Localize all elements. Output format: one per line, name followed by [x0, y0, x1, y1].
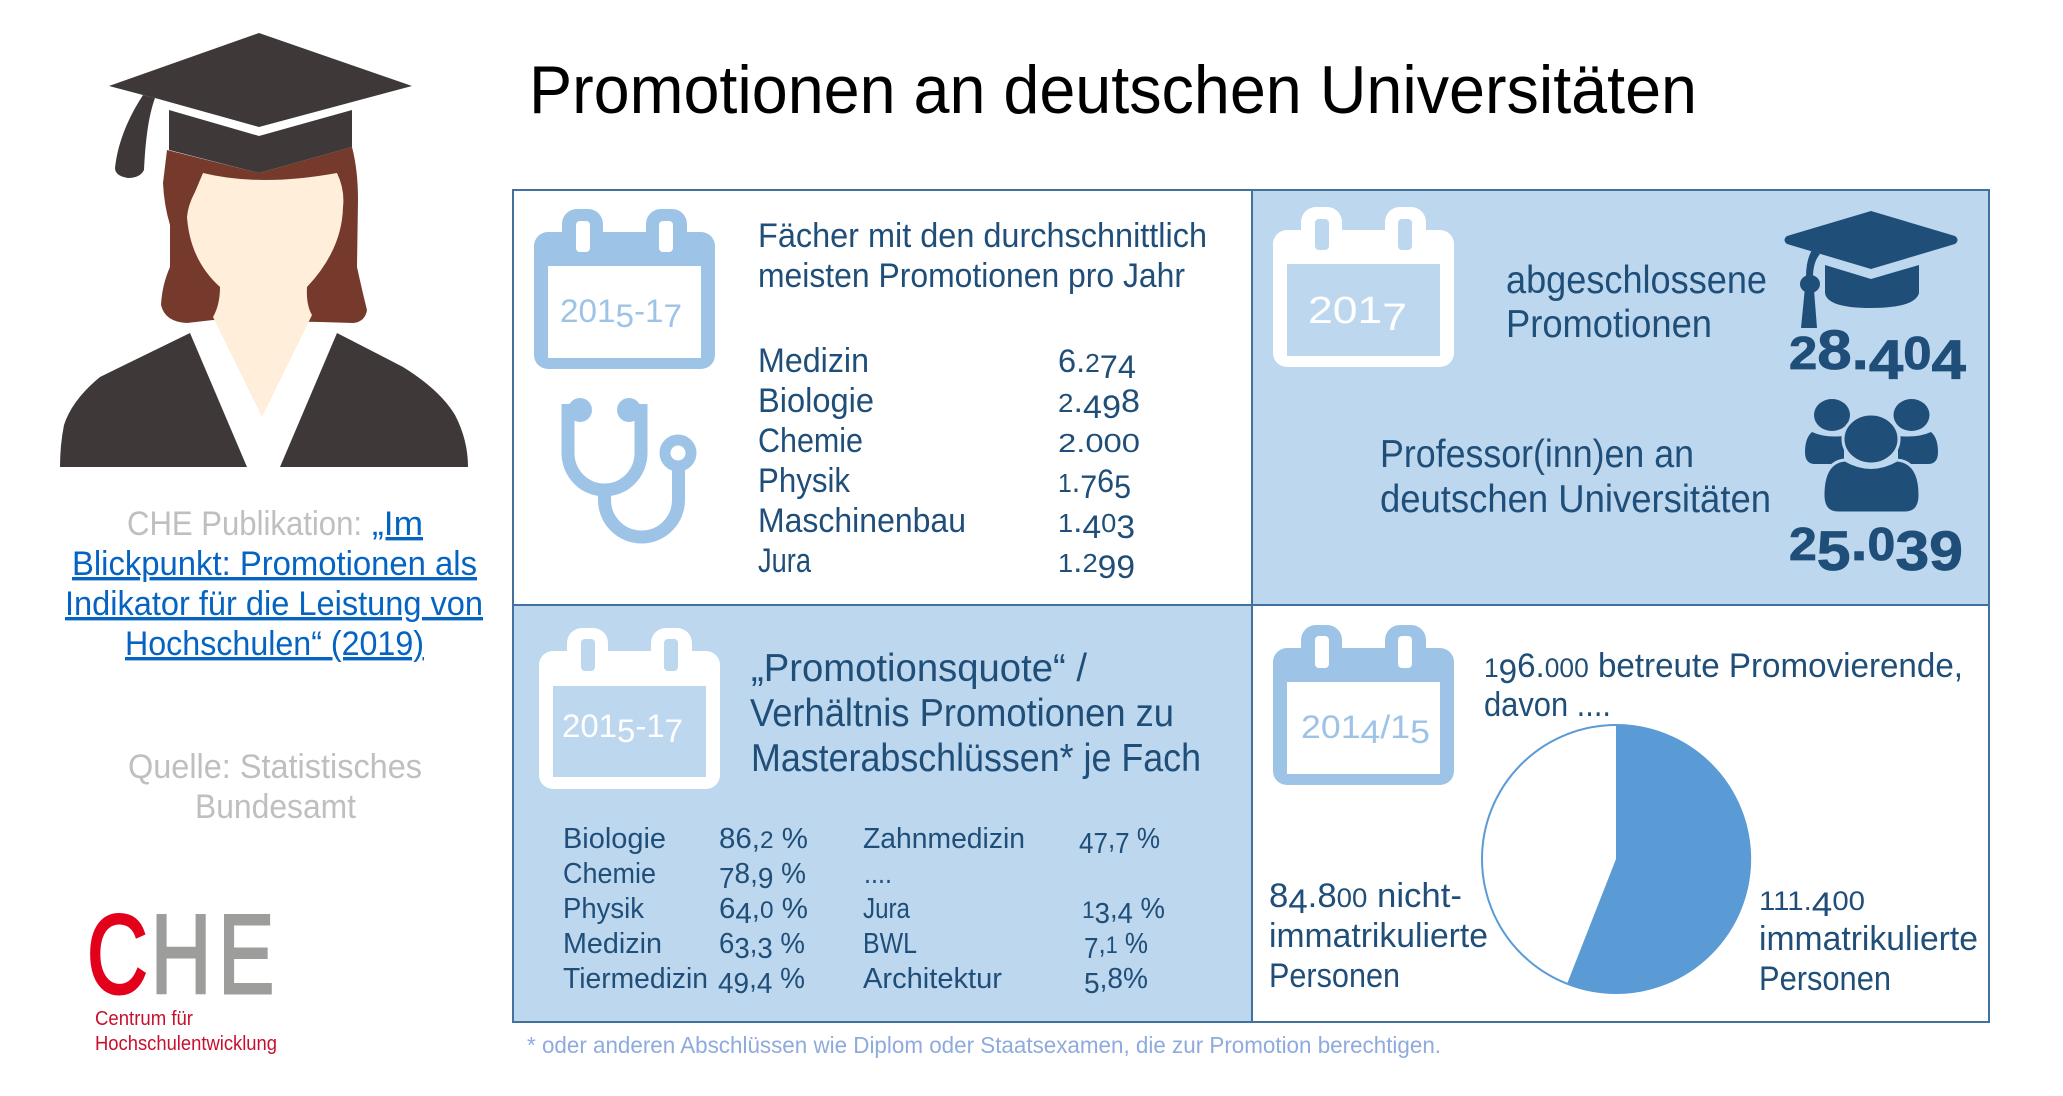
table: lowest rates: 4 [1118, 898, 1133, 930]
list: subject values: 1. [1058, 503, 1082, 539]
list: subject values: 8 [1121, 383, 1140, 419]
list: subject values: 1.2 [1058, 543, 1097, 579]
table: lowest rates: 1 % [1106, 928, 1152, 960]
table: lowest rates: 7 [1115, 828, 1130, 860]
list: subject names: Biologie [758, 382, 874, 420]
table: highest rates: 9 [758, 863, 773, 895]
table: lowest rates: BWL [863, 928, 917, 960]
label: non-enrolled [1269, 877, 1488, 995]
table: highest rates: 6 [719, 893, 735, 925]
value: 25.039: 5 [1817, 519, 1851, 582]
source note: Bundesamt [195, 788, 357, 826]
value: 25.039: 39 [1895, 519, 1963, 582]
value: 28.404: 28. [1789, 318, 1864, 381]
icon: calendar 2015-17: 7 [665, 713, 683, 749]
panel: top-left subjects [513, 190, 1252, 605]
label: non-enrolled: Personen [1269, 957, 1400, 995]
label: non-enrolled: 00 nicht- [1337, 877, 1460, 915]
table: lowest rates [863, 823, 1165, 1000]
heading: doctoral rate: „Promotionsquote“ / [751, 647, 1087, 690]
heading: doctoral rate [750, 647, 1201, 780]
list: subject values: 49 [1083, 389, 1121, 425]
label: enrolled [1759, 886, 1978, 998]
table: highest rates: 49 [718, 968, 749, 1000]
label: completed doctorates: abgeschlossene [1506, 259, 1767, 302]
table: lowest rates: Zahnmedizin [863, 823, 1025, 855]
list: subject values [1058, 343, 1140, 585]
icon: calendar 2014/15 [1273, 625, 1454, 785]
list: subject names: Jura [758, 542, 811, 580]
list: subject values: 2.000 [1058, 428, 1140, 458]
list: subject values: 2. [1058, 383, 1082, 419]
table: highest rates: % [773, 928, 805, 960]
value: 25.039: 0 [1868, 518, 1895, 570]
panel: top-right totals [1252, 190, 1989, 605]
list: subject values: 6.2 [1058, 343, 1100, 379]
heading: doctoral rate: Verhältnis Promotionen zu [750, 692, 1174, 735]
value: 25.039: . [1851, 509, 1868, 572]
label: completed doctorates: Promotionen [1506, 303, 1712, 346]
logo: CHE: Hochschulentwicklung [95, 1033, 277, 1055]
label: enrolled: Personen [1759, 960, 1891, 998]
table: lowest rates: Jura [863, 893, 911, 925]
table: highest rates: Chemie [563, 858, 656, 890]
list: subject values: 99 [1098, 549, 1135, 585]
icon: calendar 2014/15: 4 [1361, 714, 1380, 750]
list: subject values: 74 [1100, 349, 1136, 385]
label: professors: Professor(inn)en an [1380, 433, 1694, 476]
list: subject values: 4 [1082, 509, 1101, 545]
icon: mortarboard [1784, 211, 1958, 328]
value: 25.039: 2 [1789, 518, 1817, 570]
icon: calendar 2017 [1273, 207, 1454, 367]
publication reference [65, 505, 483, 663]
table: highest rates: Medizin [563, 928, 662, 960]
table: lowest rates: % [1130, 823, 1160, 855]
table: lowest rates: , [1110, 893, 1118, 925]
table: highest rates: 3 [757, 933, 773, 965]
label: non-enrolled: 4 [1288, 883, 1308, 921]
table: lowest rates: % [1133, 893, 1165, 925]
logo: CHE: C [87, 891, 148, 1017]
table: lowest rates: .... [864, 858, 892, 890]
publication reference: Hochschulen“ (2019) [125, 625, 424, 663]
table: highest rates: 7 [719, 863, 735, 895]
table: highest rates [563, 823, 808, 1000]
icon: calendar 2014/15: /1 [1380, 709, 1410, 745]
icon: group of people [1805, 399, 1938, 513]
heading: supervised candidates: 9 [1499, 653, 1517, 691]
label: professors [1380, 433, 1771, 521]
heading: supervised candidates: davon .... [1484, 686, 1611, 724]
table: highest rates: 4 [757, 968, 772, 1000]
table: lowest rates: , [1098, 928, 1106, 960]
icon: calendar 2015-17: -1 [635, 708, 665, 744]
list: subject names: Maschinenbau [758, 502, 966, 540]
label: enrolled: 4 [1812, 886, 1832, 924]
value: 28.404: 4 [1932, 328, 1966, 391]
list: subject values: 7 [1080, 469, 1097, 505]
label: non-enrolled: .8 [1308, 877, 1337, 915]
list: subject names: Medizin [758, 342, 869, 380]
table: lowest rates: 3 [1095, 898, 1110, 930]
heading: doctoral rate: Masterabschlüssen* je Fach [751, 737, 1201, 780]
panel: bottom-left doctoral rate [513, 605, 1252, 1021]
table: highest rates: Biologie [563, 823, 666, 855]
heading: subjects: meisten Promotionen pro Jahr [758, 257, 1185, 295]
illustration: graduate with cap and gown [60, 33, 468, 467]
heading: supervised candidates [1484, 647, 1963, 724]
table: lowest rates: , [1108, 823, 1115, 855]
table: lowest rates: ,8% [1100, 963, 1148, 995]
table: highest rates: 86,2 % [719, 823, 808, 855]
panel borders [513, 190, 1989, 1022]
publication reference: Indikator für die Leistung von [65, 585, 483, 623]
list: subject names: Physik [758, 462, 851, 500]
heading: supervised candidates: 6. [1517, 647, 1545, 685]
icon: calendar 2014/15: 5 [1410, 714, 1430, 750]
table: highest rates: Tiermedizin [563, 963, 708, 995]
table: lowest rates: 7 [1084, 933, 1098, 965]
icon: calendar 2015-17: 5 [615, 298, 634, 334]
icon: calendar 2015-17: 5 [617, 713, 635, 749]
table: lowest rates: 5 [1084, 968, 1100, 1000]
table: lowest rates: 1 [1082, 897, 1095, 924]
logo: CHE: Centrum für [95, 1008, 193, 1030]
footnote: * oder anderen Abschlüssen wie Diplom oder Staatsexamen, die zur Promotion berechtigen. [527, 1032, 1441, 1058]
table: highest rates: 4 [735, 898, 752, 930]
label: completed doctorates [1506, 259, 1767, 346]
label: non-enrolled: 8 [1269, 877, 1288, 915]
label: enrolled: 00 [1832, 886, 1865, 916]
icon: calendar 2017: 7 [1382, 297, 1407, 339]
list: subject names [758, 342, 966, 580]
table: highest rates: Physik [563, 893, 644, 925]
icon: calendar 2015-17 [539, 628, 720, 789]
logo: CHE [87, 891, 277, 1055]
heading: supervised candidates: 1 [1484, 653, 1499, 683]
source note: Quelle: Statistisches [128, 748, 422, 786]
icon: calendar 2017: 201 [1308, 290, 1371, 332]
pie chart [1482, 724, 1751, 993]
table: highest rates: 0 % [760, 893, 807, 925]
heading: subjects: Fächer mit den durchschnittlich [758, 217, 1207, 255]
heading: subjects [758, 217, 1207, 295]
logo: CHE: E [218, 891, 274, 1017]
list: subject values: 5 [1114, 469, 1131, 505]
table: highest rates: , [749, 963, 757, 995]
table: highest rates: 8, [735, 858, 758, 890]
table: highest rates: , [752, 893, 760, 925]
list: subject names: Chemie [758, 422, 863, 460]
list: subject values: 1. [1058, 463, 1081, 499]
publication reference: „Im [372, 505, 423, 543]
icon: calendar 2014/15: 201 [1301, 709, 1354, 745]
table: highest rates: 6 [719, 928, 735, 960]
source note [128, 748, 422, 826]
list: subject values: 0 [1101, 508, 1116, 538]
list: subject values: 3 [1116, 509, 1135, 545]
value: 28.404: 0 [1903, 327, 1932, 379]
value: 28.404: 4 [1869, 328, 1903, 391]
list: subject values: 6 [1097, 463, 1114, 499]
icon: calendar 2015-17 [534, 209, 715, 369]
label: enrolled: immatrikulierte [1759, 920, 1978, 958]
publication reference: CHE Publikation: [127, 505, 362, 543]
label: enrolled: 111. [1759, 886, 1812, 916]
table: highest rates: 3 [734, 933, 750, 965]
icon: calendar 2015-17: 201 [560, 293, 613, 329]
icon: stethoscope [568, 398, 691, 537]
label: non-enrolled: immatrikulierte [1269, 917, 1488, 955]
icon: calendar 2015-17: 201 [562, 708, 615, 744]
table: highest rates: % [773, 858, 806, 890]
table: highest rates: , [750, 928, 757, 960]
icon: calendar 2015-17: -1 [634, 293, 664, 329]
publication reference: Blickpunkt: Promotionen als [72, 545, 477, 583]
logo: CHE: H [151, 891, 211, 1017]
table: lowest rates: 47 [1079, 828, 1108, 860]
label: professors: deutschen Universitäten [1380, 478, 1771, 521]
heading: supervised candidates: 000 betreute Promovierende, [1545, 647, 1972, 685]
panel: bottom-right supervised candidates [1252, 605, 1989, 1021]
table: highest rates: % [772, 963, 805, 995]
title: Promotionen an deutschen Universitäten [529, 52, 1697, 128]
icon: calendar 2015-17: 7 [664, 298, 682, 334]
table: lowest rates: Architektur [863, 963, 1002, 995]
